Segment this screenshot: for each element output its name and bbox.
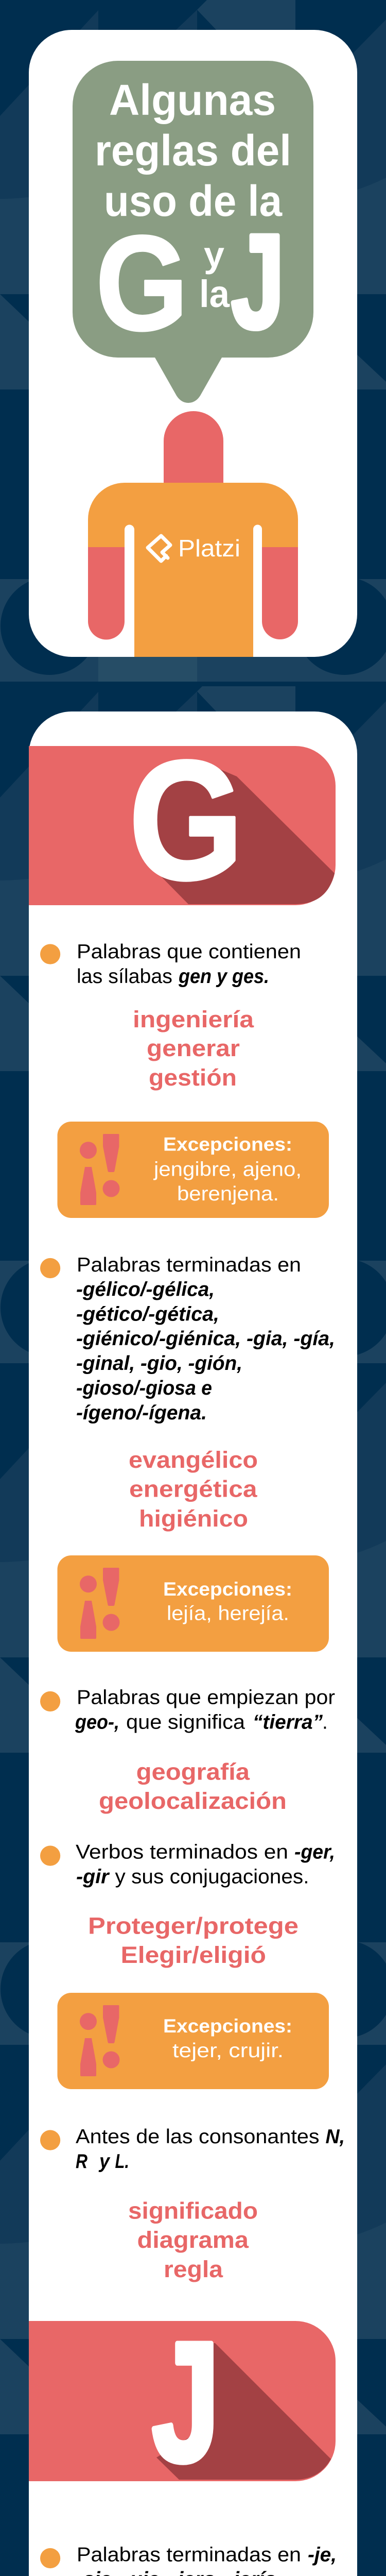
rule 3: geo-, — [75, 1711, 119, 1733]
rule 5: significado — [128, 2198, 258, 2224]
title: G — [96, 208, 188, 359]
rule 2: -gético/-gética, — [76, 1303, 219, 1325]
rule 3: geolocalización — [99, 1788, 287, 1814]
title: uso de la — [104, 177, 283, 225]
exception box 2 — [58, 1555, 329, 1652]
exception box 2: lejía, herejía. — [167, 1602, 289, 1625]
rule 5: N, — [325, 2126, 345, 2148]
rule 2: energética — [129, 1476, 258, 1502]
character with Platzi shirt — [88, 411, 298, 657]
rule 4: -ger, — [294, 1841, 335, 1863]
rule 1: ingeniería — [133, 1006, 254, 1032]
icon: exclamation marks — [80, 1568, 119, 1639]
rule 3: . — [322, 1711, 328, 1733]
exception box 3: Excepciones: — [163, 2015, 292, 2037]
rule 4: Elegir/eligió — [120, 1942, 266, 1968]
rule 5: L. — [115, 2150, 129, 2173]
Platzi logo: Platzi — [178, 535, 240, 562]
rule 3: que significa — [126, 1711, 245, 1733]
panel: rules card — [29, 711, 357, 2576]
title: Algunas — [109, 76, 276, 124]
exception box 1: berenjena. — [177, 1183, 279, 1205]
rule 2: -giénico/-giénica, -gia, -gía, — [76, 1328, 335, 1350]
rule 3: geografía — [136, 1759, 250, 1785]
rule 5 — [40, 2126, 345, 2282]
rule 5: y — [98, 2150, 111, 2173]
rule 6: Palabras terminadas en — [77, 2544, 301, 2566]
title: la — [199, 273, 230, 315]
banner: letter G: G — [129, 725, 243, 915]
exception box 3 — [58, 1993, 329, 2089]
rule 2: -ígeno/-ígena. — [76, 1402, 207, 1424]
title: J — [231, 207, 285, 357]
rule 5: R — [76, 2150, 87, 2173]
speech bubble — [73, 61, 313, 403]
rule 2: -gioso/-giosa e — [76, 1377, 212, 1399]
exception box 1 — [58, 1122, 329, 1218]
rule 2: evangélico — [129, 1447, 258, 1473]
rule 2: -ginal, -gio, -gión, — [76, 1352, 242, 1375]
rule 4: Proteger/protege — [88, 1912, 299, 1939]
exception box 3: tejer, crujir. — [172, 2040, 284, 2062]
rule 1: generar — [147, 1035, 240, 1061]
banner: letter J: J — [152, 2307, 220, 2497]
rule 1: gen y ges. — [178, 965, 269, 988]
rule 3 — [40, 1687, 335, 1814]
rule 1: las sílabas — [77, 965, 172, 988]
rule 5: Antes de las consonantes — [76, 2126, 319, 2148]
rule 4 — [40, 1841, 335, 1968]
exception box 1: Excepciones: — [163, 1133, 292, 1155]
icon: exclamation marks — [80, 1134, 119, 1205]
title — [95, 76, 291, 359]
rule 1: Palabras que contienen — [77, 941, 301, 963]
rule 2 — [40, 1254, 335, 1532]
rule 4: y sus conjugaciones. — [115, 1866, 309, 1888]
banner: letter J — [29, 2307, 336, 2497]
rule 5: diagrama — [137, 2227, 249, 2253]
rule 1: gestión — [149, 1064, 237, 1091]
Platzi logo — [148, 535, 240, 562]
title: reglas del — [95, 126, 291, 175]
rule 2: higiénico — [139, 1505, 248, 1532]
exception box 1: jengibre, ajeno, — [153, 1158, 302, 1181]
rule 4: Verbos terminados en — [76, 1841, 288, 1863]
rule 2: -gélico/-gélica, — [76, 1279, 215, 1300]
rule 1 — [40, 941, 301, 1091]
banner: letter G — [29, 725, 336, 915]
panel: title card — [29, 30, 357, 657]
exception box 2: Excepciones: — [163, 1579, 292, 1600]
icon: exclamation marks — [80, 2005, 119, 2076]
rule 2: Palabras terminadas en — [77, 1254, 301, 1276]
rule 3: Palabras que empiezan por — [77, 1687, 335, 1709]
title: y — [204, 234, 224, 275]
rule 6: -je, — [308, 2544, 337, 2566]
rule 5: regla — [164, 2256, 223, 2282]
rule 4: -gir — [76, 1866, 110, 1888]
rule 3: “tierra” — [253, 1711, 323, 1733]
rule 6 — [40, 2544, 337, 2576]
